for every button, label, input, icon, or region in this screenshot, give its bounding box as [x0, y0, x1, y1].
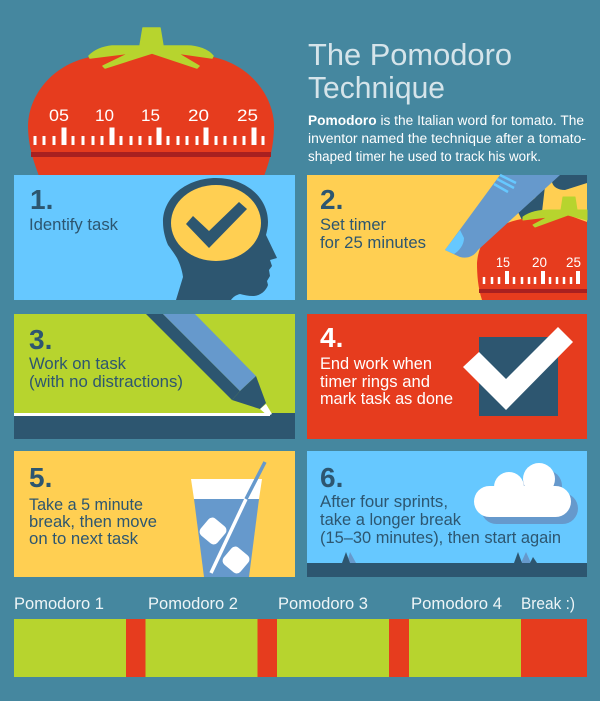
step 3 text: Work on task [29, 354, 126, 373]
sprint timeline labels: Break :) [521, 595, 575, 613]
step 6 text: (15–30 minutes), then start again [320, 528, 561, 547]
icon: small tomato timer: 15 [496, 255, 510, 270]
step 4 heading: 4. [320, 322, 343, 353]
title [308, 37, 512, 105]
step 4 text: mark task as done [320, 389, 453, 408]
icon: small tomato timer: 25 [566, 255, 581, 270]
icon: hand lower finger [518, 186, 545, 222]
intro text block: inventor named the technique after a tomato- [308, 131, 586, 146]
icon: tomato timer: 05 [49, 106, 69, 125]
icon: small tomato timer: 20 [532, 255, 547, 270]
panel: step 5 take a break [14, 451, 295, 577]
step 5 text [29, 495, 157, 548]
step 6 text [320, 492, 561, 547]
intro text block: shaped timer he used to track his work. [308, 149, 541, 164]
step 3 text: (with no distractions) [29, 372, 183, 391]
icon: small tomato timer [477, 197, 587, 300]
panel: step 6 longer break [307, 451, 587, 577]
intro text block [308, 113, 586, 164]
step 4 text: End work when [320, 354, 432, 373]
sprint timeline labels: Pomodoro 2 [148, 595, 238, 613]
sprint timeline labels: Pomodoro 3 [278, 595, 368, 613]
step 1 text: Identify task [29, 215, 118, 234]
icon: cloud [474, 463, 578, 524]
step 5 text: on to next task [29, 529, 138, 548]
intro text block: Pomodoro is the Italian word for tomato. The [308, 113, 584, 128]
panel: step 2 set timer [307, 175, 587, 300]
step 3 heading: 3. [29, 324, 52, 355]
step 3 text [29, 354, 183, 391]
title: The Pomodoro [308, 37, 512, 72]
step 5 heading: 5. [29, 462, 52, 493]
icon: tomato timer: 15 [141, 106, 160, 125]
step 6 heading: 6. [320, 462, 343, 493]
step 4 text: timer rings and [320, 372, 430, 391]
icon: tomato timer: 10 [95, 106, 114, 125]
icon: hand pressing timer [445, 175, 587, 258]
step 5 text: break, then move [29, 512, 157, 531]
step 6 text: After four sprints, [320, 492, 448, 511]
step 2 text: Set timer [320, 215, 386, 234]
step 1 heading: 1. [30, 184, 53, 215]
icon: pencil [146, 314, 272, 416]
step 5 text: Take a 5 minute [29, 495, 143, 514]
sprint timeline bar [14, 619, 587, 677]
title: Technique [308, 70, 445, 105]
icon: tomato timer: 25 [237, 106, 258, 125]
icon: glass with ice and straw [191, 462, 265, 577]
step 2 heading: 2. [320, 184, 343, 215]
step 4 text [320, 354, 453, 408]
ground with trees [307, 552, 587, 577]
panel: step 4 end work [307, 314, 587, 439]
step 2 text [320, 215, 426, 252]
icon: head with checkmark [163, 178, 277, 300]
icon: checked box [463, 327, 573, 416]
icon: tomato timer: 20 [188, 106, 209, 125]
icon: tomato timer [28, 28, 274, 176]
step 2 text: for 25 minutes [320, 233, 426, 252]
step 6 text: take a longer break [320, 510, 461, 529]
panel: step 1 identify task [14, 175, 295, 300]
panel: step 3 work on task [14, 314, 295, 439]
sprint timeline labels: Pomodoro 4 [411, 595, 502, 613]
sprint timeline labels [14, 595, 575, 613]
sprint timeline labels: Pomodoro 1 [14, 595, 104, 613]
